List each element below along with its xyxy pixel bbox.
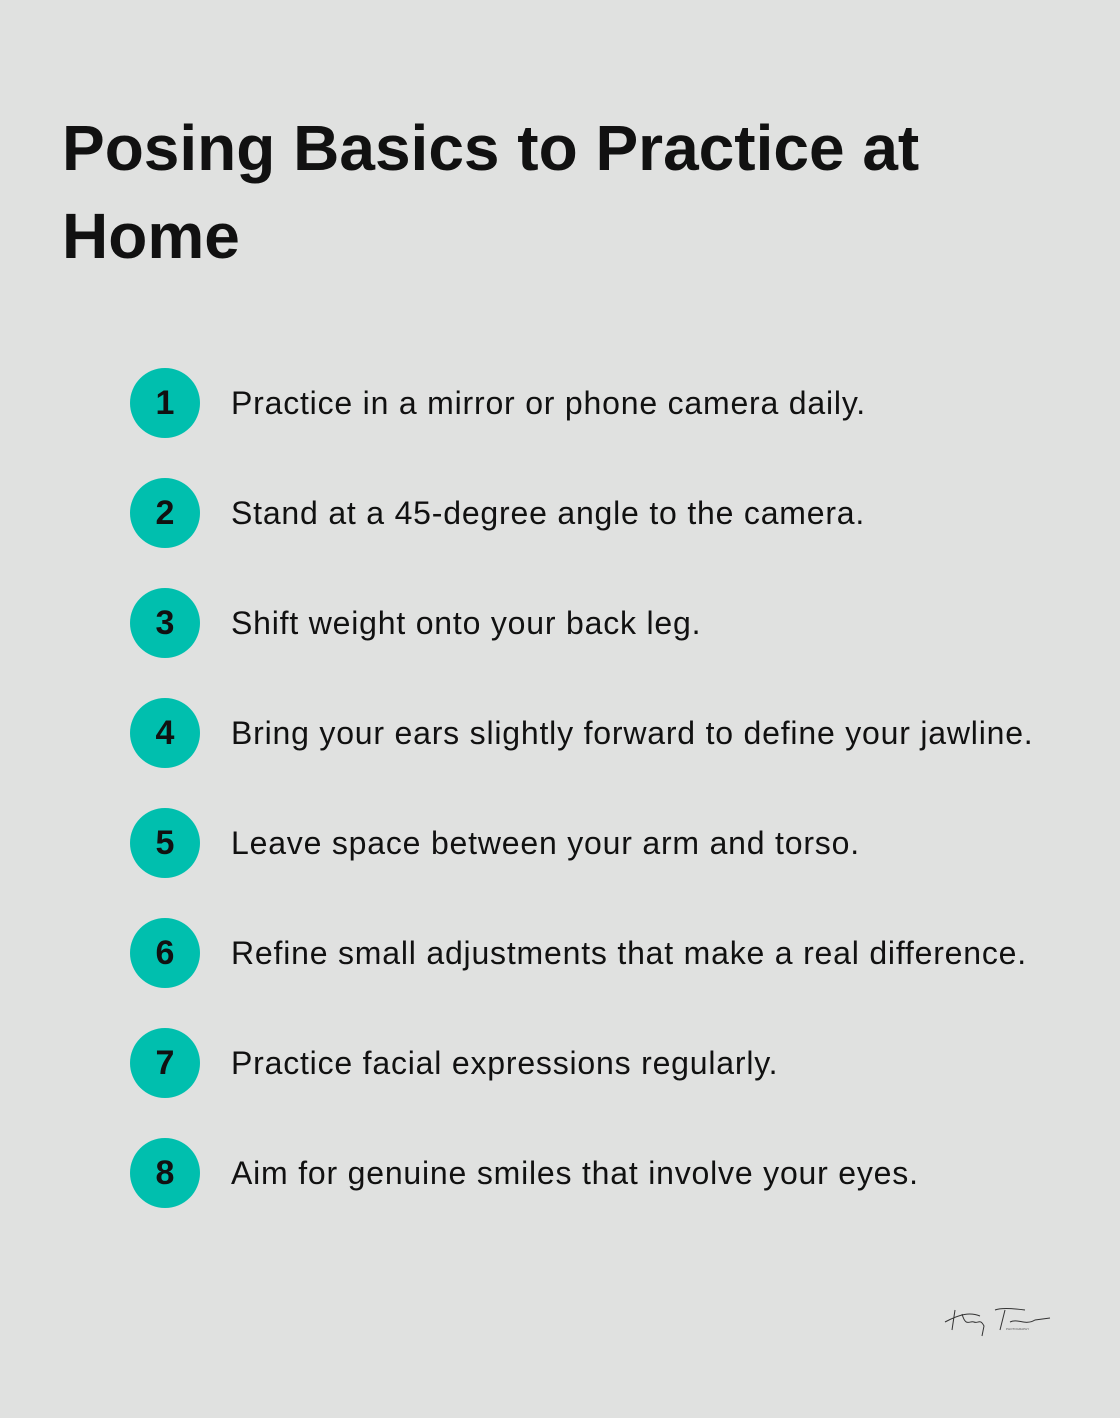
item 7 <box>130 1028 778 1098</box>
title <box>62 112 919 272</box>
item 2 <box>130 478 865 548</box>
item 2: Stand at a 45-degree angle to the camera. <box>231 495 865 531</box>
item 8: Aim for genuine smiles that involve your eyes. <box>231 1155 919 1191</box>
item 8: 8 <box>156 1154 174 1192</box>
item 3 <box>130 588 701 658</box>
item 7: 7 <box>156 1044 174 1082</box>
title: Posing Basics to Practice at <box>62 112 919 184</box>
item 3: Shift weight onto your back leg. <box>231 605 701 641</box>
item 1: Practice in a mirror or phone camera daily. <box>231 385 866 421</box>
item 4 <box>130 698 1034 768</box>
item 5 <box>130 808 860 878</box>
item 4: 4 <box>156 714 174 752</box>
item 5: Leave space between your arm and torso. <box>231 825 860 861</box>
item 8 <box>130 1138 919 1208</box>
item 3: 3 <box>156 604 174 642</box>
item 6 <box>130 918 1027 988</box>
item 4: Bring your ears slightly forward to define your jawline. <box>231 715 1034 751</box>
item 6: 6 <box>156 934 174 972</box>
item 6: Refine small adjustments that make a real difference. <box>231 935 1027 971</box>
item 1: 1 <box>156 384 174 422</box>
item 2: 2 <box>156 494 174 532</box>
item 7: Practice facial expressions regularly. <box>231 1045 778 1081</box>
title: Home <box>62 200 240 272</box>
item 5: 5 <box>156 824 174 862</box>
logo: signature <box>944 1308 1050 1336</box>
logo: signature: PHOTOGRAPHY <box>1006 1327 1029 1331</box>
item 1 <box>130 368 866 438</box>
